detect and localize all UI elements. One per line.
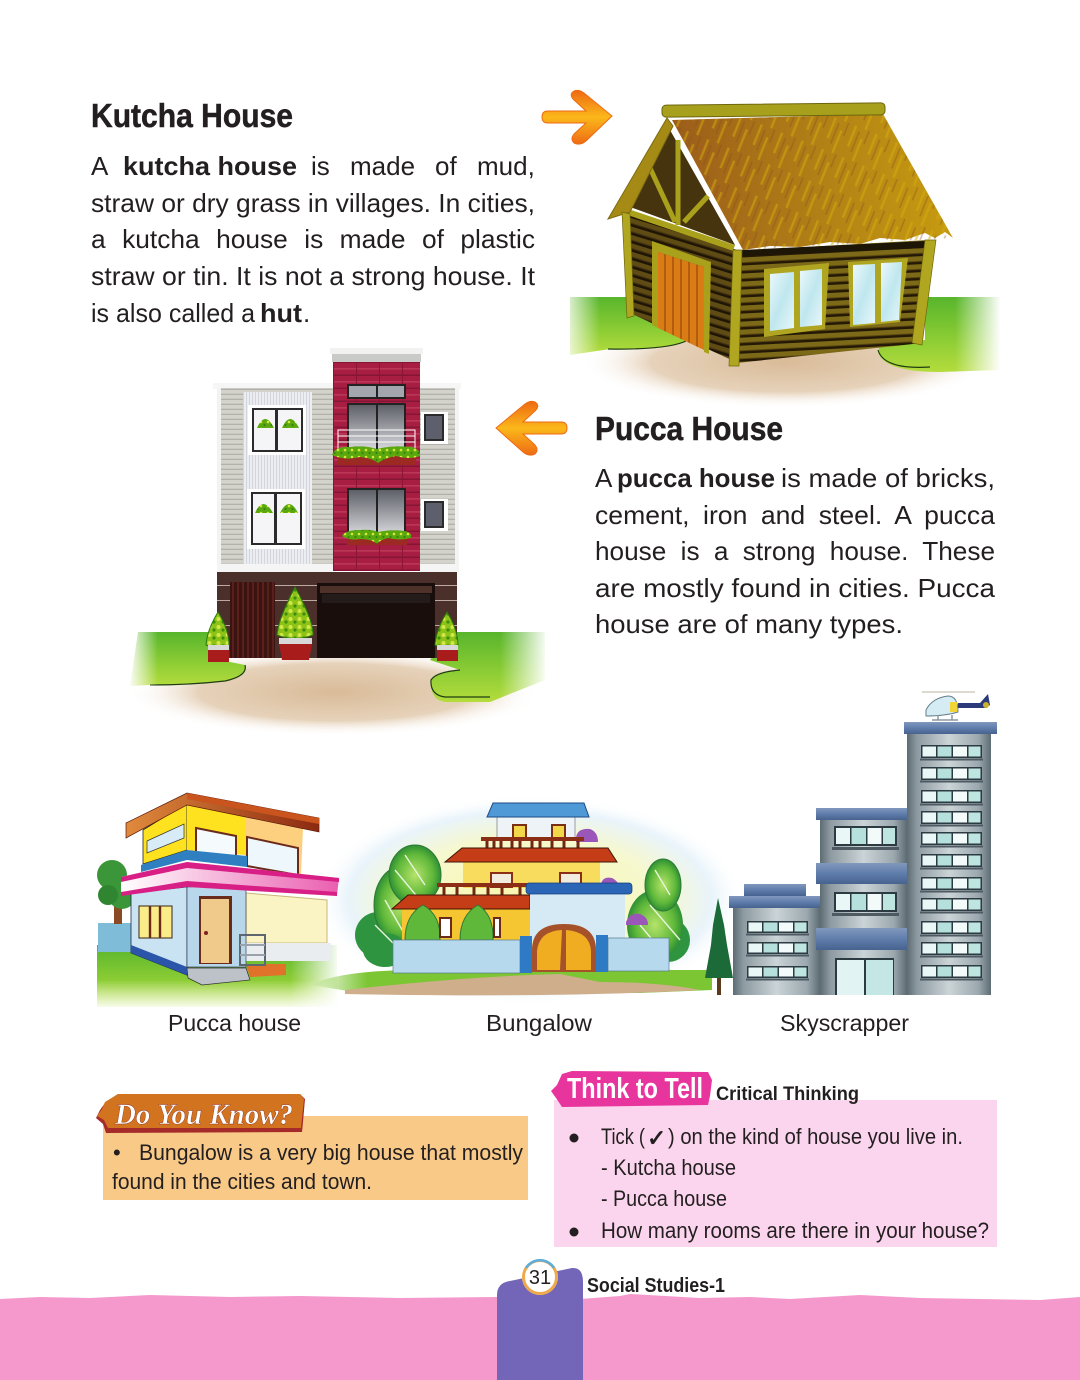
hut front wall xyxy=(737,240,927,363)
pucca house picture xyxy=(97,793,339,985)
purple tab xyxy=(497,1268,583,1380)
hut ground xyxy=(560,295,1001,408)
paragraph: kutcha house description: hut xyxy=(260,298,302,328)
paragraph: pucca house description: house are of many types. xyxy=(595,609,903,639)
house ground xyxy=(125,630,548,736)
caption: Pucca house: Pucca house xyxy=(168,1010,301,1036)
page number badge: 31 xyxy=(529,1267,551,1289)
heading: Kutcha House: Kutcha House xyxy=(91,97,293,134)
do you know text: Bungalow is a very big house that mostly xyxy=(139,1140,523,1165)
helicopter xyxy=(922,692,990,720)
paragraph: kutcha house description: of xyxy=(435,151,457,181)
gable bamboo beams xyxy=(622,140,734,248)
page number badge xyxy=(522,1259,558,1295)
door xyxy=(199,896,232,964)
ridge pole xyxy=(662,103,885,117)
right wing siding xyxy=(420,383,461,572)
side windows xyxy=(421,412,448,531)
think to tell questions xyxy=(570,1124,989,1243)
front wall xyxy=(187,887,246,967)
paragraph: kutcha house description: a kutcha house is made of plastic xyxy=(91,224,535,254)
flower boxes xyxy=(332,446,420,545)
bungalow picture xyxy=(355,803,690,973)
thatch roof xyxy=(672,114,953,250)
arched gate xyxy=(532,924,596,972)
illustration: kutcha hut xyxy=(560,103,1001,408)
section: kutcha house text xyxy=(91,97,536,328)
boundary wall xyxy=(393,935,669,973)
paragraph: pucca house description: pucca house xyxy=(617,463,775,493)
iron gate xyxy=(230,582,275,658)
think to tell questions: How many rooms are there in your house? xyxy=(601,1218,989,1243)
paragraph: kutcha house description: is xyxy=(311,151,330,181)
top railing xyxy=(481,837,584,850)
garage door xyxy=(317,583,435,658)
hut left wall xyxy=(625,213,738,363)
left wing xyxy=(392,895,530,942)
do you know banner: Do You Know? xyxy=(114,1098,293,1131)
balcony band xyxy=(141,850,247,880)
low block xyxy=(729,884,820,995)
footer title: Social Studies-1 xyxy=(587,1275,725,1297)
think to tell questions: Tick ( xyxy=(601,1124,646,1149)
arrow: points right to the hut xyxy=(542,90,612,144)
left roof edge xyxy=(608,118,673,219)
upper yellow walls xyxy=(143,803,303,875)
steps xyxy=(187,935,286,985)
do you know text: found in the cities and town. xyxy=(112,1169,372,1194)
second floor xyxy=(445,848,620,891)
arrow: points left to the pucca house xyxy=(496,401,567,455)
paragraph: kutcha house description: . xyxy=(303,298,310,328)
gable xyxy=(630,130,735,245)
left wing windows xyxy=(247,405,306,549)
balcony railing xyxy=(338,430,415,450)
heading: Pucca House: Pucca House xyxy=(595,410,783,447)
paragraph: kutcha house description: A xyxy=(91,151,109,181)
paragraph: pucca house description: house is a strong house. These xyxy=(595,536,995,566)
paragraph: pucca house description xyxy=(595,463,996,639)
hut door xyxy=(652,241,711,354)
left wing siding xyxy=(213,383,333,572)
left window xyxy=(139,906,172,938)
paragraph: kutcha house description: kutcha house xyxy=(123,151,297,181)
red brick tower xyxy=(330,348,423,571)
middle block xyxy=(816,808,912,995)
caption: Skyscrapper: Skyscrapper xyxy=(780,1010,909,1036)
fir tree xyxy=(705,898,733,995)
ground floor base xyxy=(217,572,457,658)
think to tell questions: ) on the kind of house you live in. xyxy=(668,1124,963,1149)
think to tell background xyxy=(554,1100,997,1247)
caption: Bungalow: Bungalow xyxy=(486,1010,592,1036)
label: critical thinking: Critical Thinking xyxy=(716,1084,859,1105)
lower wall xyxy=(131,887,187,975)
paragraph: pucca house description: is made of bricks, xyxy=(781,463,995,493)
top floor xyxy=(487,803,598,842)
think to tell banner: Think to Tell xyxy=(567,1073,703,1105)
skyscraper picture xyxy=(705,692,997,995)
paragraph: pucca house description: are mostly found in cities. Pucca xyxy=(595,573,996,603)
footer pink band xyxy=(0,1294,1080,1380)
panel: do you know xyxy=(96,1094,528,1200)
strip background glow xyxy=(315,795,745,1005)
illustration: three house types strip xyxy=(97,692,997,1010)
paragraph: kutcha house description: straw or tin. It is not a strong house. It xyxy=(91,261,536,291)
paragraph: kutcha house description: made xyxy=(350,151,415,181)
think to tell questions: - Pucca house xyxy=(601,1186,727,1211)
do you know background xyxy=(103,1116,528,1200)
second railing xyxy=(437,883,527,896)
pink band xyxy=(121,862,339,896)
illustration: pucca house xyxy=(125,348,548,736)
hut corner posts xyxy=(622,212,936,366)
paragraph: kutcha house description: mud, xyxy=(477,151,535,181)
right trees xyxy=(627,859,690,962)
paragraph: pucca house description: A xyxy=(595,463,613,493)
footer xyxy=(0,1259,1080,1380)
panel: think to tell xyxy=(551,1071,997,1247)
left trees xyxy=(355,845,441,967)
paragraph: kutcha house description: is also called a xyxy=(91,298,256,328)
right wing xyxy=(526,883,648,941)
section: pucca house text xyxy=(595,410,996,639)
strip ground xyxy=(97,943,712,1010)
think to tell questions: ✓ xyxy=(647,1126,666,1152)
potted plants xyxy=(206,587,458,662)
do you know text: • xyxy=(113,1140,121,1165)
shop window xyxy=(246,893,327,943)
hut windows xyxy=(764,258,908,337)
orange roof xyxy=(126,793,319,838)
paragraph: pucca house description: cement, iron and steel. A pucca xyxy=(595,500,996,530)
paragraph: kutcha house description xyxy=(91,151,536,328)
do you know text xyxy=(112,1140,523,1194)
paragraph: kutcha house description: straw or dry grass in villages. In cities, xyxy=(91,188,535,218)
tower windows xyxy=(347,384,406,534)
think to tell questions: - Kutcha house xyxy=(601,1155,736,1180)
background tree and wall xyxy=(97,860,136,952)
tall tower xyxy=(904,722,997,995)
